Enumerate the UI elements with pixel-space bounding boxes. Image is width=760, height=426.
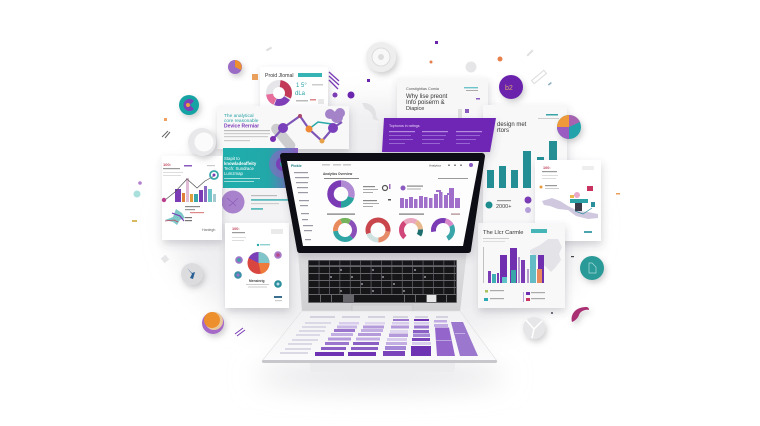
icon: orange purple ball [228,60,242,74]
panel: Proid Jlomal donut card: Proid Jlomal [265,73,294,79]
panel: left bar chart card [162,156,222,240]
panel: teal banner [223,148,298,188]
icon: crimson crescent [572,307,589,322]
keyboard [308,260,457,303]
decorative fragments [132,41,620,336]
trackpad [352,305,413,311]
icon: purple badge: b2 [505,85,513,92]
panel: Proid Jlomal donut card: 1 5° [296,83,307,89]
icon: grey disc top [366,42,396,72]
screen stats [363,184,423,207]
panel: The Llcr Carmle card: The Llcr Carmle [483,230,523,236]
panel: line chart card [217,106,349,153]
icon: grey pin disc [181,263,203,285]
panel: left bar chart card: 100: [163,162,171,167]
panel: pie chart card: 100: [232,227,240,231]
panel: pie chart card: Mensinrig [249,279,265,283]
pie badge [557,115,581,139]
panel: teal banner: Lumzmap [224,171,243,176]
panel: The Llcr Carmle card [478,223,565,308]
panel: Proid Jlomal donut card: dLa [295,91,306,97]
lower deck [262,311,497,361]
panel: teal bars report card [483,105,567,223]
panel: Why lise preont card: Diapice [406,106,424,112]
panel: map card: 100: [543,166,551,170]
panel: map card [535,160,601,241]
keyboard deck [298,250,467,312]
panel: Proid Jlomal donut card [260,67,328,110]
icon: grey pill disc [523,317,545,339]
panel: teal bars report card: 2000+ [496,204,511,210]
panel: teal banner: Tech: Sundrace [224,166,254,171]
screen header: Analytics [429,164,442,168]
panel: teal banner: knowladeaffeity [224,161,257,166]
table on deck [280,316,478,356]
panel: line chart card: Device Rerniar [224,124,259,130]
screen heading: Analytics Overview [323,172,353,176]
icon: layered ball [202,312,224,334]
donut row [332,217,454,243]
panel: line chart card: core reasonable [224,118,259,124]
main donut [330,184,352,204]
screen bar chart [400,188,460,208]
panel: Why lise preont card: Why lise preont [406,94,448,100]
icon: grey cup [188,128,216,156]
panel: purple banner: Tophoros in rattngs [389,124,420,128]
laptop screen [283,156,482,250]
panel: purple banner [382,118,496,152]
chart labels [327,214,460,215]
icon: purple badge [499,75,523,99]
icon: teal disc [580,256,604,280]
panel: Why lise preont card: Info poiserm & [406,100,445,106]
screen header [291,163,473,168]
panel: line chart card: The analytical [224,113,254,119]
panel: Why lise preont card: Constightias Comia [406,87,440,91]
panel: teal bars report card: rtors [497,128,509,134]
screen sidebar [294,172,313,240]
panel: teal bars report card: design met [497,122,527,128]
stand [310,360,455,372]
laptop base [262,250,497,372]
panel: Why lise preont card [397,78,488,126]
panel: white strip under banner [222,188,294,224]
panel: left bar chart card: Hanlegh [202,228,215,232]
screen display [287,161,479,246]
screen header: Piokle [291,164,302,168]
panel: teal banner: Stapit to [224,156,240,161]
icon: teal badge [179,95,199,115]
panel: pie chart card [225,223,289,308]
